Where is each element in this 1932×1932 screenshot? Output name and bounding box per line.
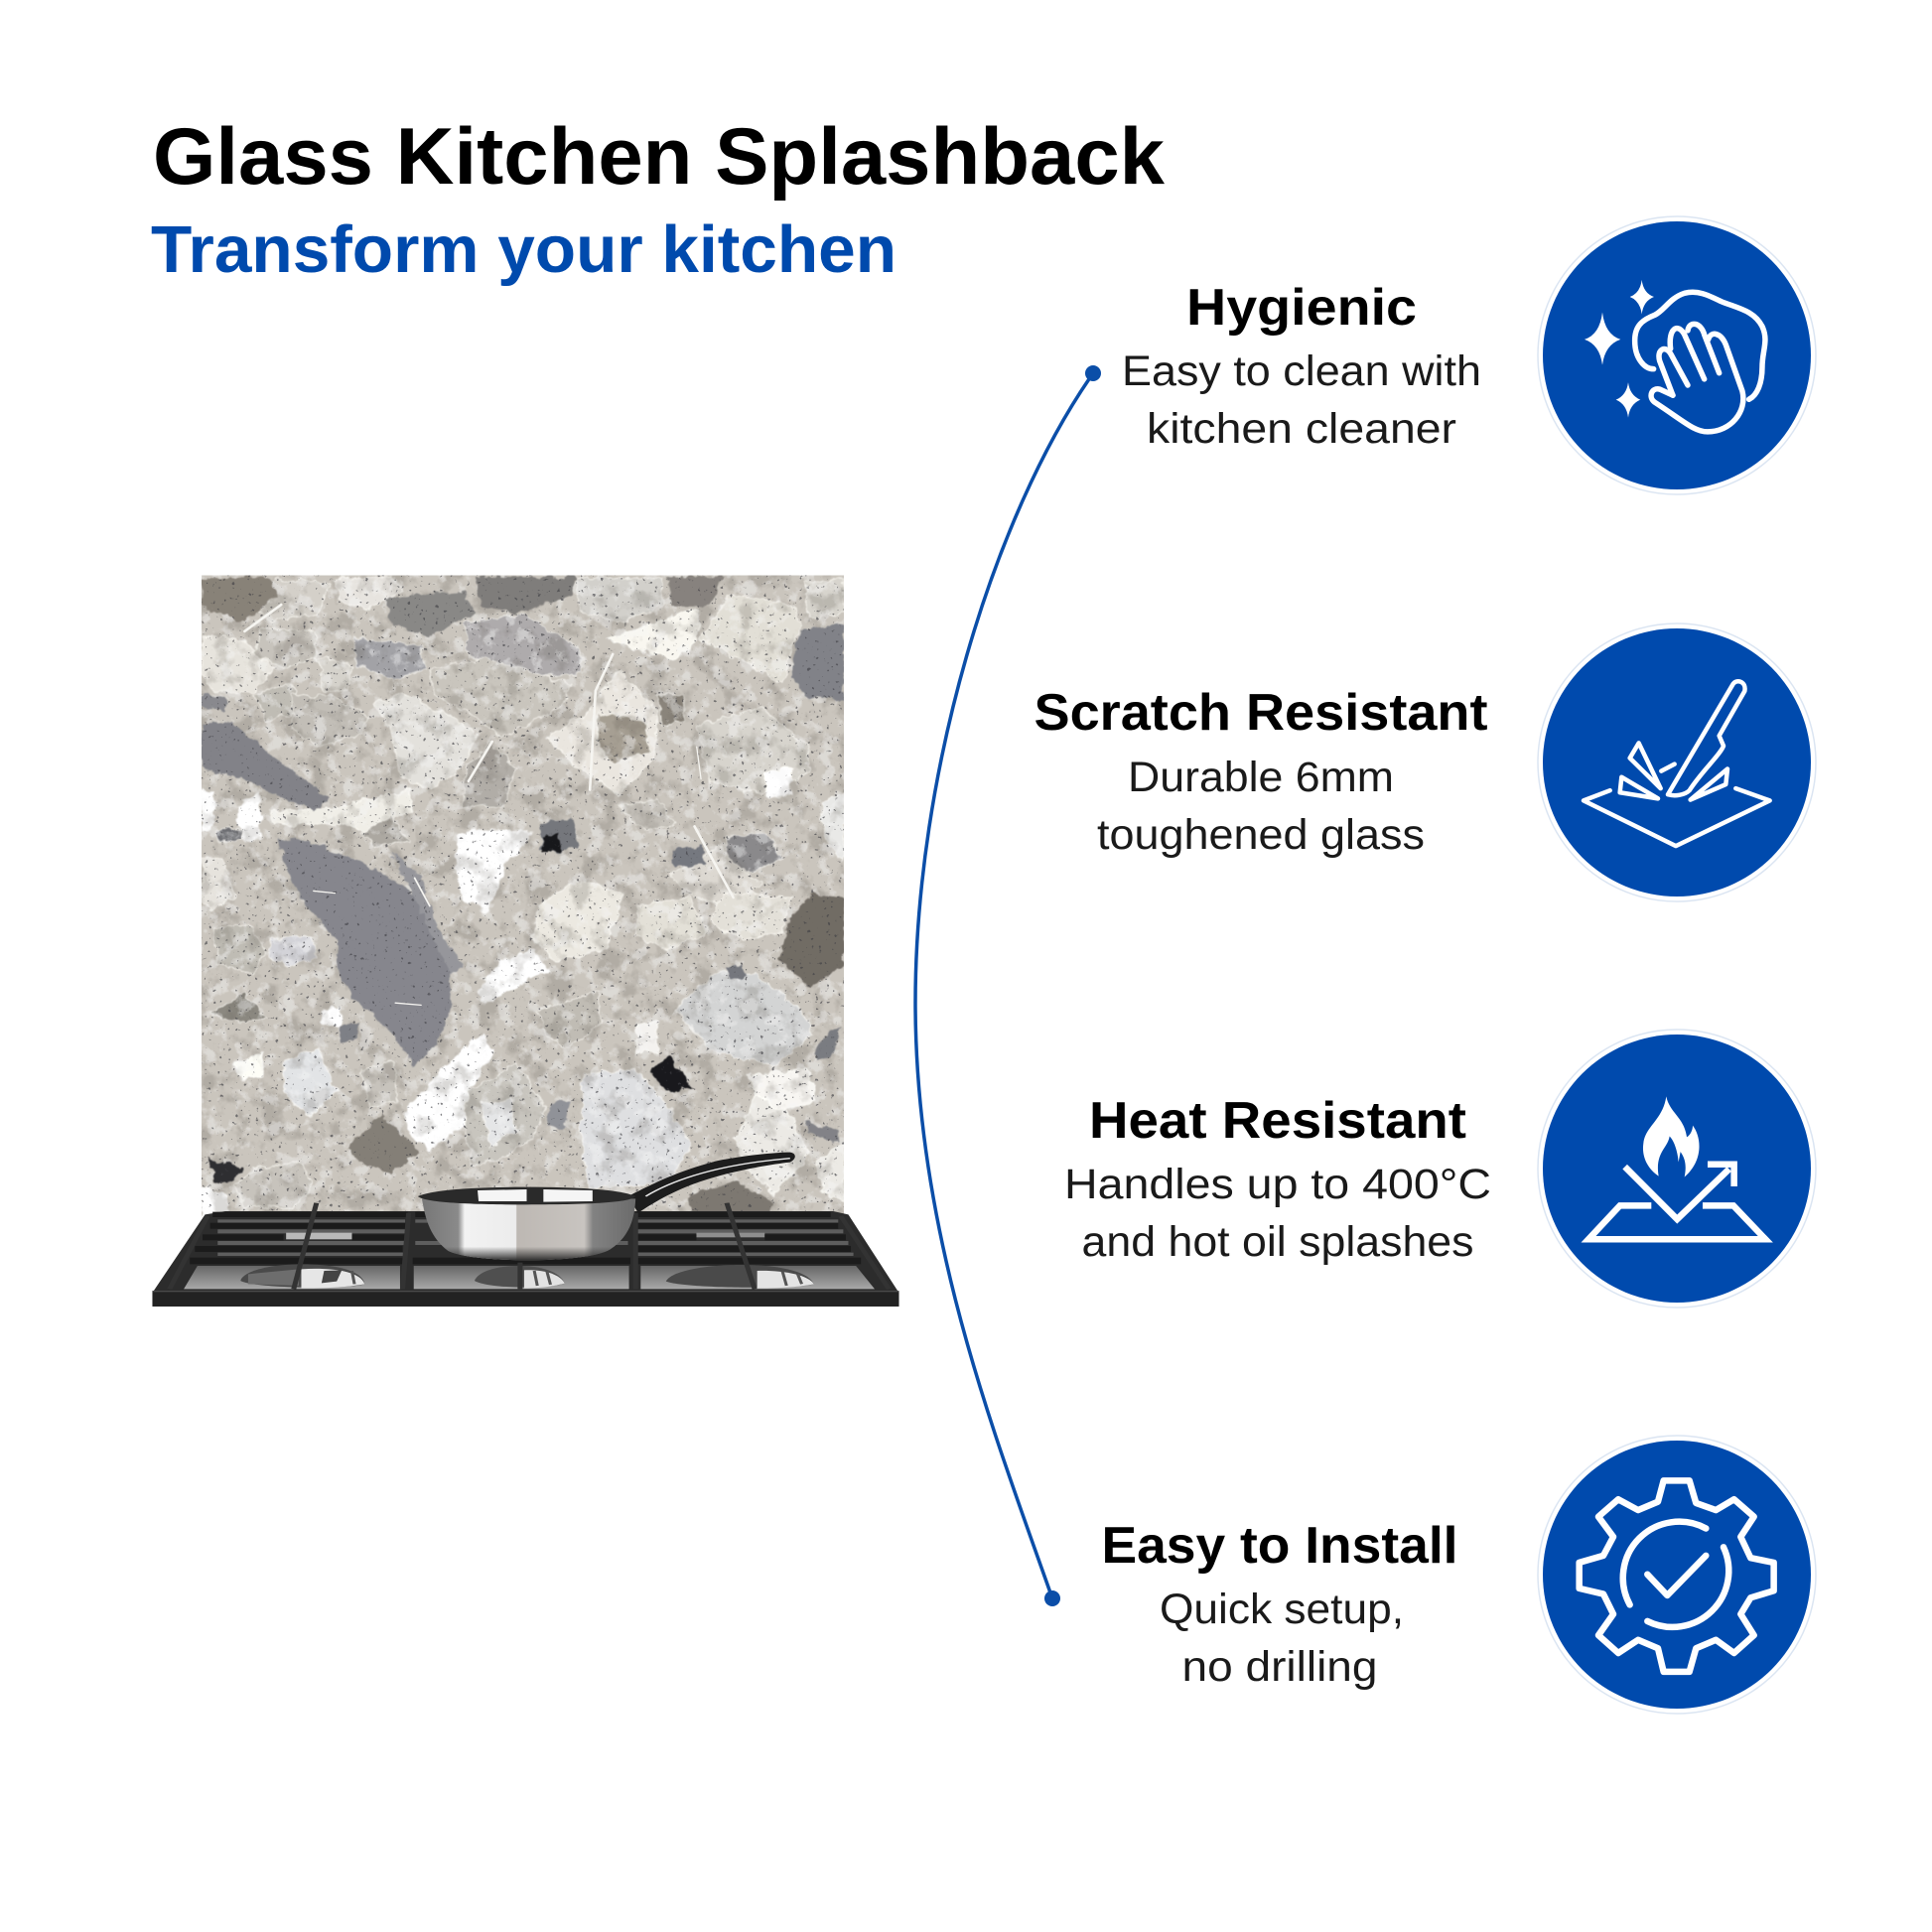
pan rim	[418, 1187, 635, 1204]
grate bars	[190, 1212, 861, 1264]
feature: scratch resistant	[1035, 684, 1487, 859]
feature: hygienic: Easy to clean with	[1122, 347, 1481, 395]
feature: heat resistant: Heat Resistant	[1089, 1092, 1466, 1150]
frying pan	[418, 1153, 795, 1260]
feature: hygienic	[1122, 279, 1481, 453]
feature: easy to install: Quick setup,	[1160, 1586, 1404, 1633]
grate uprights	[170, 1203, 889, 1289]
subtitle: Transform your kitchen	[151, 212, 897, 287]
pan handle	[628, 1153, 795, 1213]
feature: heat resistant: and hot oil splashes	[1082, 1218, 1473, 1266]
curved connector line	[915, 365, 1101, 1606]
icon: knife scratching glass	[1538, 623, 1816, 901]
second row	[373, 693, 478, 790]
rear deck shading	[217, 1219, 854, 1256]
icon: gear with check mark	[1538, 1436, 1816, 1714]
feature: hygienic: kitchen cleaner	[1147, 405, 1456, 453]
top row	[253, 579, 331, 621]
icon: hand wiping with cloth	[1538, 216, 1816, 494]
pan body	[422, 1198, 635, 1260]
icon: flame on surface with arrow	[1538, 1030, 1816, 1308]
rear burners	[286, 1233, 764, 1239]
feature: hygienic: Hygienic	[1186, 279, 1417, 337]
feature: heat resistant	[1064, 1092, 1491, 1266]
dark accent stones	[202, 577, 844, 1221]
feature: scratch resistant: Scratch Resistant	[1035, 684, 1487, 742]
hob front edge	[152, 1291, 899, 1307]
feature: scratch resistant: toughened glass	[1097, 811, 1425, 859]
feature: easy to install: no drilling	[1181, 1643, 1378, 1691]
feature: easy to install: Easy to Install	[1102, 1517, 1457, 1575]
gas hob	[152, 1203, 899, 1307]
feature: scratch resistant: Durable 6mm	[1128, 754, 1394, 801]
title: Glass Kitchen Splashback	[153, 112, 1166, 202]
hob deck	[153, 1211, 897, 1292]
mid stones	[270, 790, 413, 831]
front burners	[240, 1264, 814, 1289]
feature: easy to install	[1102, 1517, 1457, 1691]
feature: heat resistant: Handles up to 400°C	[1064, 1161, 1491, 1208]
steel panels	[184, 1266, 875, 1289]
lower stones	[404, 1034, 495, 1148]
marble glass splashback panel	[202, 576, 844, 1218]
